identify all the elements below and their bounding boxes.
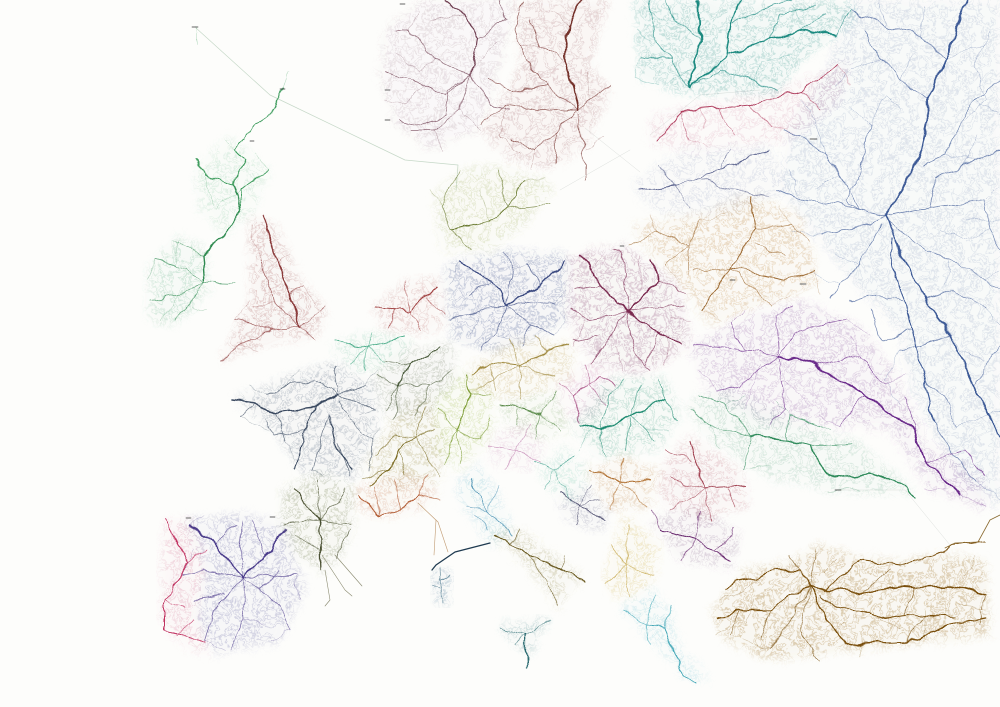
river basin: Sicily	[497, 618, 550, 668]
river basin: Burgundy and Rhone west	[362, 395, 445, 490]
connector: Balearic islands	[322, 555, 362, 606]
river basin: southern France	[355, 472, 440, 520]
river basin: Norway	[380, 0, 515, 150]
river basin: Romania	[685, 390, 915, 498]
river basin: Belarus	[630, 195, 820, 325]
river basin: Poland	[568, 245, 690, 375]
connector: Corsica	[418, 503, 448, 555]
river basin: northern Italy, light blue	[455, 465, 515, 545]
connector: Iceland to Denmark sea route	[196, 28, 458, 190]
river basin: Slovenia pink	[488, 420, 548, 470]
river basin: Catalonia	[280, 472, 355, 575]
river basin: Germany	[445, 250, 570, 352]
river basin: Alpine west, lime green	[435, 370, 495, 470]
river basin: Luxembourg region	[372, 342, 455, 420]
river basin: Sardinia and its link	[432, 543, 490, 605]
river basin: Portugal	[160, 520, 210, 655]
river basin: Russia	[775, 0, 1000, 510]
river basin: Turkey	[712, 540, 990, 660]
river basin: Bulgaria purple	[650, 505, 740, 570]
river basin: Croatia light teal	[535, 445, 590, 505]
river basin: Hungary	[572, 378, 680, 458]
river basin: Romania south, red	[660, 435, 748, 522]
river basin: Ireland	[148, 185, 242, 325]
river basin: Belgium	[330, 330, 412, 372]
river basin: Bosnia slate	[556, 485, 610, 532]
river basin: Macedonia yellow	[605, 515, 660, 600]
river basin: France	[232, 362, 380, 480]
river basin: Spain	[180, 512, 305, 655]
river basin: Austria, green	[502, 390, 570, 440]
river basin: southern Italy, olive	[492, 530, 585, 610]
river basin: Latvia	[630, 145, 790, 215]
river basin: Greece	[620, 588, 710, 682]
river basin: Scotland and Iceland headwaters	[195, 28, 288, 235]
river basin: Netherlands	[372, 278, 445, 335]
river basin: Serbia orange	[585, 455, 660, 512]
city label marks	[186, 4, 841, 518]
river basin: Estonia	[650, 60, 850, 150]
connector: Turkey to Caucasus	[945, 515, 1000, 548]
connector: Baltic and Black Sea links	[560, 90, 950, 545]
river basin: Denmark	[432, 165, 555, 250]
river basin: Great Britain	[220, 215, 328, 360]
river basin: Sweden	[480, 0, 610, 180]
river basin: Ukraine	[690, 300, 985, 510]
river basin: Switzerland and Austria north, tan	[470, 335, 575, 400]
river basin: Finland	[632, 0, 855, 95]
river basin: Czech and Slovak pink	[558, 360, 620, 425]
